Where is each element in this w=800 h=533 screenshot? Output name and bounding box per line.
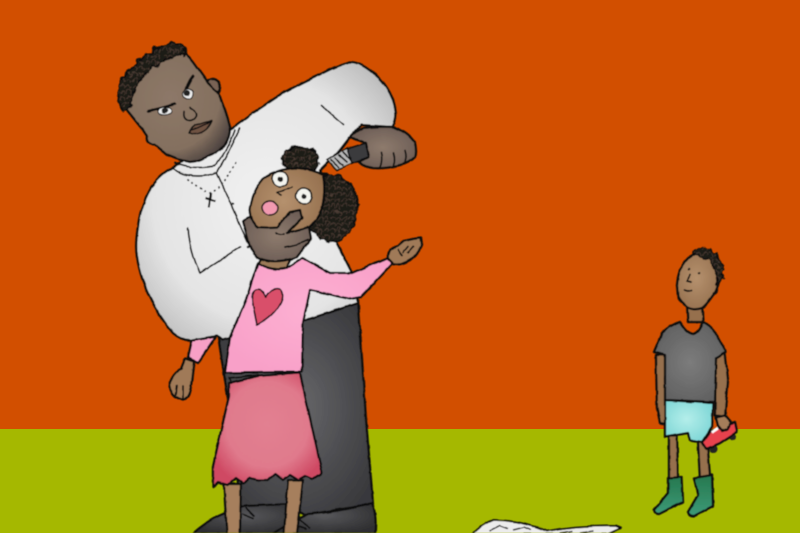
man's hand on girl's face <box>243 210 311 261</box>
boy's head <box>677 253 720 309</box>
girl's lowered arm and hand <box>170 336 216 400</box>
green floor <box>0 429 800 533</box>
girl's right eye <box>296 188 312 204</box>
lowered hand <box>170 359 194 400</box>
ear <box>206 79 220 94</box>
boy's shorts <box>665 400 713 442</box>
girl's legs <box>224 480 303 533</box>
man's head <box>118 43 230 162</box>
girl's raised hand <box>387 238 422 264</box>
arm fold line <box>322 106 343 125</box>
boy's neck <box>687 304 703 322</box>
shirt buttons <box>233 204 248 247</box>
girl's skirt <box>213 373 322 487</box>
placket <box>217 173 248 243</box>
girl's face <box>250 168 324 242</box>
brow and eye right <box>183 75 194 99</box>
clipper body <box>347 143 369 163</box>
man's raised fist <box>350 127 416 168</box>
boy <box>654 248 737 516</box>
hand-drawn figures <box>118 43 737 533</box>
boy's ear <box>711 288 716 297</box>
girl's nose <box>277 187 292 195</box>
girl's neck <box>258 256 292 269</box>
left shoe <box>192 504 298 533</box>
man's white shirt <box>136 62 396 340</box>
girl's left eye <box>272 172 288 186</box>
boy's right arm <box>715 353 728 416</box>
girl's open mouth <box>262 201 278 215</box>
girl's hair bun <box>282 147 318 172</box>
face <box>122 46 230 162</box>
girl's left leg <box>224 484 241 533</box>
girl's pink top <box>225 258 393 373</box>
boy's grey t-shirt <box>654 322 726 402</box>
boy's hand on car <box>716 415 731 431</box>
boy's hair <box>693 248 723 284</box>
open book on floor <box>472 520 621 533</box>
girl's head <box>250 168 324 242</box>
clipper comb <box>327 148 352 170</box>
sleeve seam <box>188 228 240 273</box>
boy's left leg <box>669 436 678 480</box>
boy's right leg <box>698 438 710 480</box>
red toy car <box>702 422 737 453</box>
lips <box>189 121 212 134</box>
hair <box>118 43 186 111</box>
brow and eye left <box>148 104 175 115</box>
man's shoes <box>192 503 376 533</box>
boy's face features <box>689 269 699 273</box>
collar <box>173 128 240 176</box>
rosary with cross <box>188 162 236 208</box>
girl's waist <box>229 375 258 384</box>
book scribbled text <box>490 526 594 533</box>
right shoe <box>272 503 376 533</box>
man's trousers <box>218 300 373 515</box>
boy's left boot <box>654 477 683 514</box>
girl's hair back <box>308 174 358 241</box>
girl's right leg <box>284 480 303 533</box>
nose <box>184 108 196 120</box>
heart <box>252 289 283 325</box>
boy's right boot <box>688 475 713 516</box>
lowered pink sleeve <box>188 336 216 363</box>
boy's left arm <box>656 355 666 424</box>
hair clippers <box>327 143 369 170</box>
